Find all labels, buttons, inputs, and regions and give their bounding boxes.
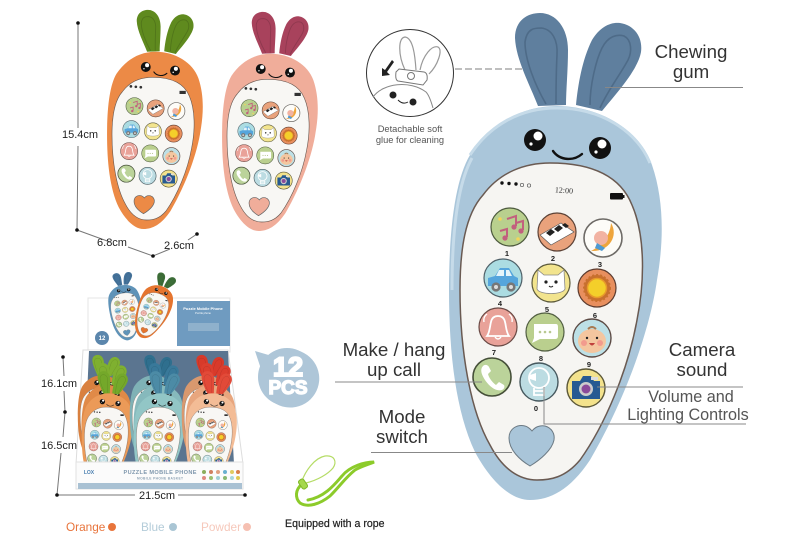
inset caption (376, 124, 444, 145)
dimension labels: phone (62, 129, 194, 252)
button numbers: 8 (539, 354, 543, 363)
box phones: orange column (78, 355, 133, 488)
legend: colours: Orange (66, 520, 106, 534)
status bar (500, 181, 624, 200)
box dimension dots (55, 355, 247, 497)
icon: green rope (296, 456, 374, 505)
icon: bunny ears (515, 13, 641, 111)
button: baby (573, 319, 611, 357)
box lid card: Puzzle phone (195, 311, 211, 315)
box dimension labels (41, 378, 175, 502)
box front panel: LOX (84, 470, 95, 476)
dimensions: box (57, 357, 245, 495)
box front panel: MOBILE PHONE BASKET (137, 476, 183, 480)
rope caption: Equipped with a rope (285, 518, 385, 530)
main phone: blue bunny carrot (449, 13, 662, 500)
button: moon (584, 219, 622, 257)
button: car (484, 259, 522, 297)
button numbers: 4 (498, 299, 503, 308)
box phones: peach column (182, 355, 237, 488)
callout: camera sound: sound (677, 359, 727, 380)
callout: make / hang up call: up call (367, 359, 421, 380)
callout: camera sound: Camera (669, 339, 736, 360)
badge: 12 PCS: 12 (273, 352, 303, 382)
box dimension labels: 21.5cm (139, 490, 175, 502)
badge: 12 PCS (255, 348, 319, 408)
box phones: blue column (130, 355, 185, 488)
legend: colours (66, 520, 251, 534)
legend: colours: Powder (201, 520, 241, 534)
button numbers: 9 (587, 360, 591, 369)
button: sun (578, 269, 616, 307)
box lid card: Puzzle Mobile Phone (183, 306, 224, 311)
box dimension labels: 16.5cm (41, 440, 77, 452)
dimension labels: phone: 15.4cm (62, 129, 98, 141)
inset caption: glue for cleaning (376, 135, 444, 145)
orange carrot phone (107, 10, 203, 229)
button numbers (492, 249, 602, 413)
callout: mode switch: Mode (379, 406, 425, 427)
button: music (491, 208, 529, 246)
button: message (526, 313, 564, 351)
badge: 12 PCS: PCS (268, 378, 308, 399)
callout: volume and lighting (544, 387, 749, 424)
box lid card (88, 298, 230, 352)
card phones (102, 269, 180, 343)
icon: smiling face (524, 129, 611, 159)
box dimension labels: 16.1cm (41, 378, 77, 390)
inset caption: Detachable soft (378, 124, 443, 134)
status bar: 12:00 (555, 185, 573, 196)
dimension labels: phone: 2.6cm (164, 240, 194, 252)
button: cat (532, 264, 570, 302)
callout: volume and lighting: Volume and (648, 388, 734, 406)
button numbers: 3 (598, 260, 602, 269)
callout: chewing gum: Chewing (655, 41, 727, 62)
mode heart button (509, 426, 554, 466)
button numbers: 7 (492, 348, 496, 357)
dimension dots (75, 21, 199, 258)
legend: colours: Blue (141, 520, 165, 534)
callout: make / hang up call: Make / hang (343, 339, 445, 360)
button: camera (567, 369, 605, 407)
callout: mode switch (371, 406, 512, 452)
button numbers: 6 (593, 311, 597, 320)
button: call (473, 358, 511, 396)
button: bulb (520, 363, 558, 401)
button numbers: 1 (505, 249, 509, 258)
button numbers: 2 (551, 254, 555, 263)
inset: detachable ear diagram (366, 30, 522, 116)
button: piano (538, 213, 576, 251)
callout: chewing gum (605, 41, 743, 88)
callout: mode switch: switch (376, 426, 428, 447)
phone body (449, 106, 662, 500)
pink bunny phone (222, 12, 318, 231)
button numbers: 5 (545, 305, 549, 314)
box front panel: PUZZLE MOBILE PHONE (124, 470, 197, 476)
display box (76, 269, 243, 489)
phone screen (460, 163, 642, 480)
button numbers: 0 (534, 404, 538, 413)
callout: volume and lighting: Lighting Controls (627, 406, 749, 424)
box front panel (76, 462, 243, 489)
callout: make / hang up call (335, 339, 482, 382)
callout: camera sound (597, 339, 743, 387)
callout: chewing gum: gum (673, 61, 709, 82)
box interior (76, 350, 243, 464)
box lid card: 12 (99, 336, 106, 342)
button: bell (479, 308, 517, 346)
dimensions: phone (77, 23, 197, 256)
dimension labels: phone: 6.8cm (97, 237, 127, 249)
